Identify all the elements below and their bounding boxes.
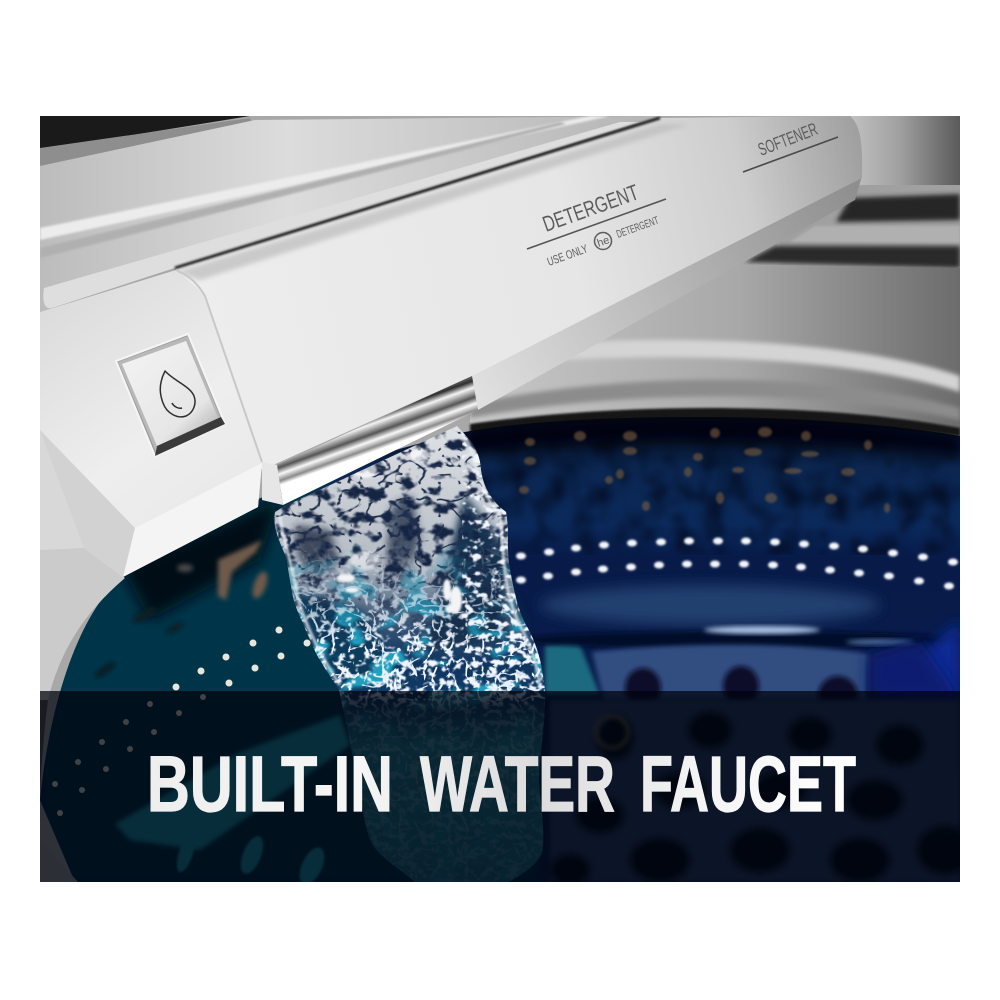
water: bright blobs [337,449,462,614]
rinse button with water drop icon [116,334,225,456]
water: dark shapes [290,495,508,680]
drum interior [40,400,973,888]
drum: brown reflections left [93,540,270,679]
label: softener: SOFTENER [755,119,820,160]
drum: right mid tones [532,579,960,698]
background: washer body [40,116,840,875]
drum lights: lower row [516,560,954,590]
washer lid [40,116,660,312]
dark caption banner [40,691,960,882]
drum: teal left wall [40,480,600,882]
label: detergent [527,179,666,269]
chrome water spout [262,376,478,505]
drum: dark ledge under rim [465,421,960,456]
drum: banner-level holes [550,700,973,886]
drum: banner-level teal shapes [115,715,350,888]
title: WATER [420,739,615,828]
drum: brown perforation specks [519,427,890,513]
dispenser main panel [175,116,862,470]
top left back edge [40,116,252,168]
drum: mottled noise [482,442,960,555]
icon: hp logo: he [596,234,611,250]
infographic photo panel [40,116,960,882]
water: teal patches [282,547,544,708]
title: BUILT-IN [147,739,393,828]
tub rim bands [470,262,960,440]
dispenser left housing [40,270,262,577]
water: right upper streaks [462,440,541,670]
top right corner of washer [745,116,960,275]
label: detergent: DETERGENT [539,179,642,237]
label: detergent: DETERGENT [615,215,661,241]
label: detergent: USE ONLY [545,241,590,269]
icon: water drop [160,371,195,417]
title: FAUCET [640,739,856,828]
left tub wall [40,430,125,882]
title [147,739,856,828]
water stream [265,420,555,885]
label: softener [743,119,838,172]
water: upper navy blotches [274,428,522,633]
drum lights: left wall [52,626,310,816]
dispenser lower lip [470,176,862,410]
drum lights: upper row [516,538,958,566]
water: bright edges [280,432,540,690]
water: white fine sparkle [286,544,545,874]
